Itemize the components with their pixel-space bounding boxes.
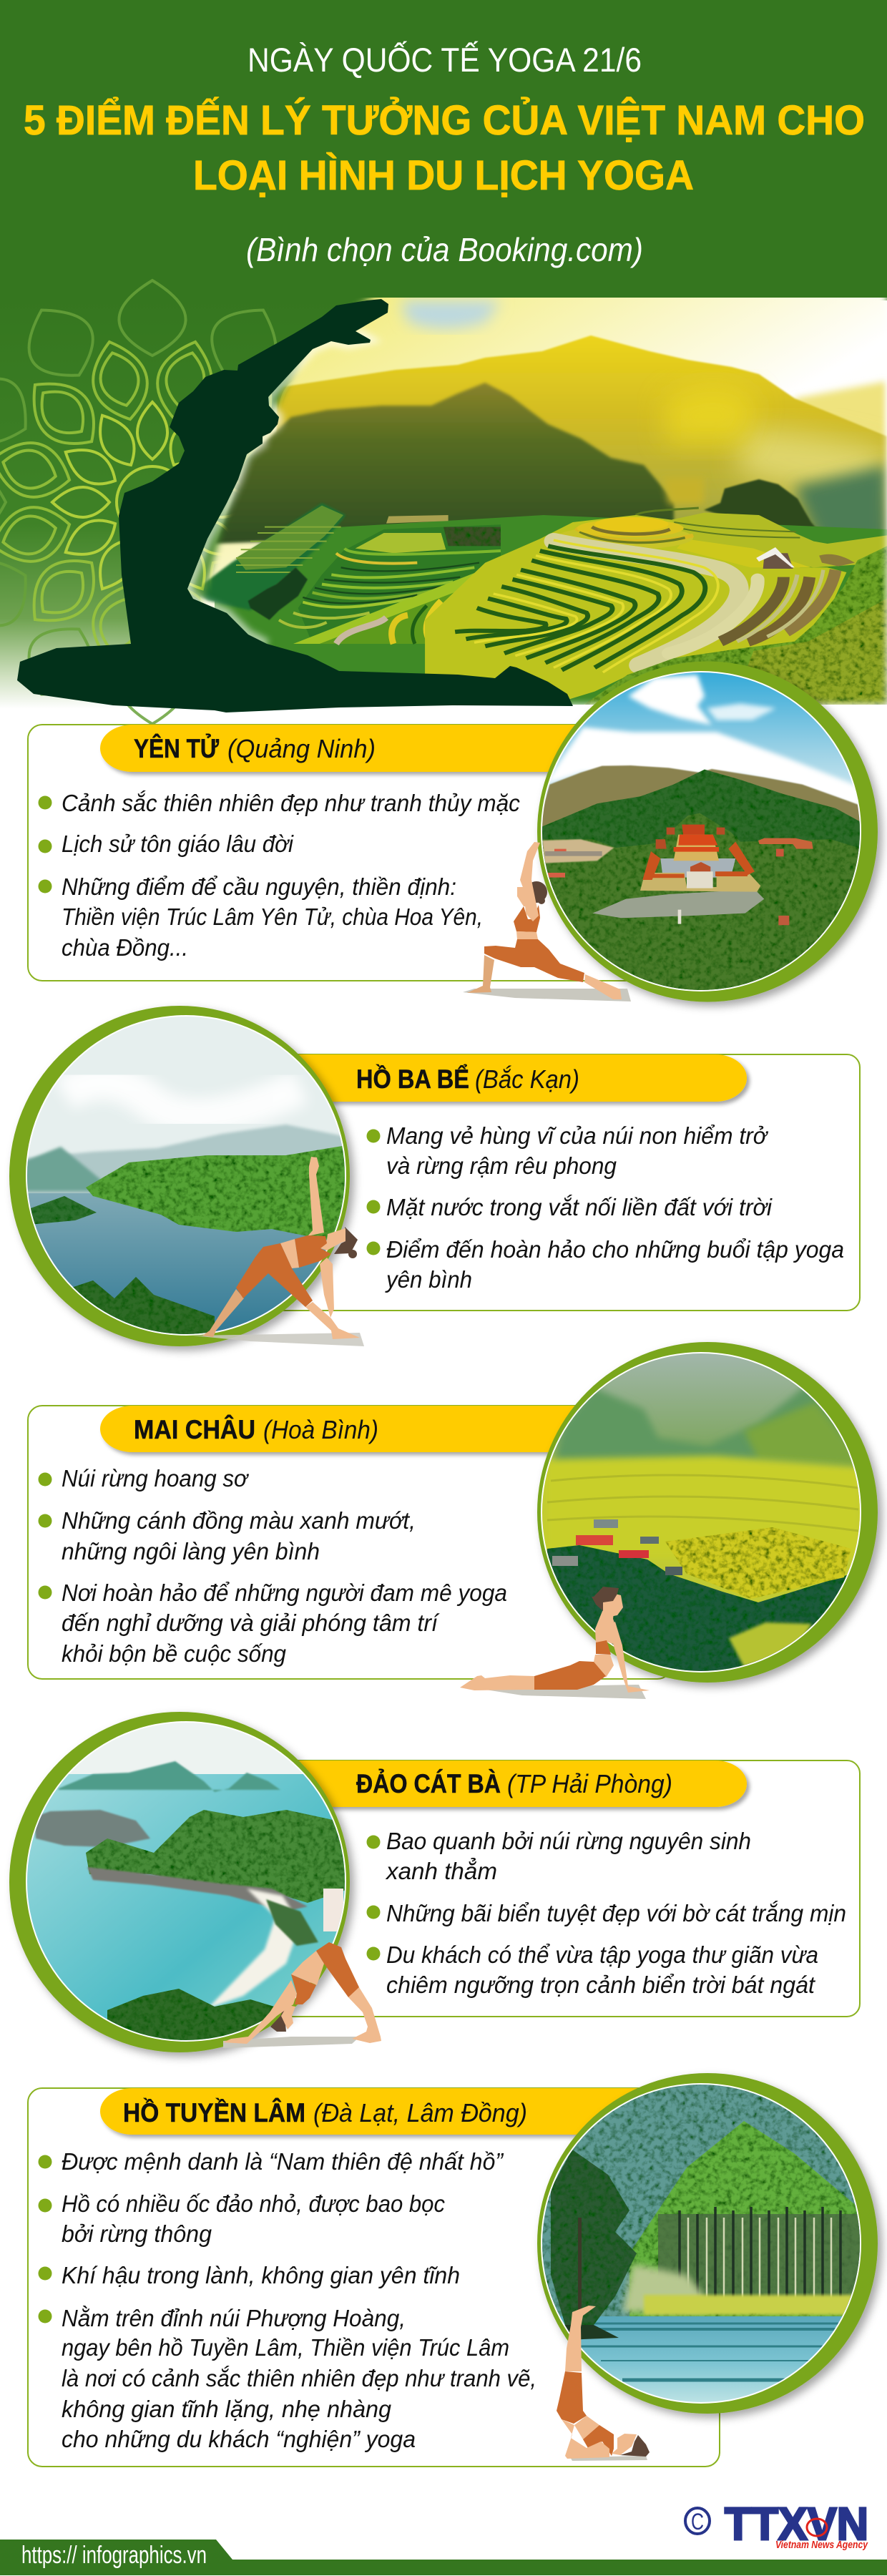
rice terrace landscape photo: [193, 298, 887, 708]
bullet list: Lịch sử tôn giáo lâu đời: [62, 831, 295, 857]
dome fields: [557, 517, 693, 549]
copyright mark: [685, 2508, 710, 2535]
bullet list: Cảnh sắc thiên nhiên đẹp như tranh thủy mặc: [62, 790, 520, 816]
mandala: [0, 279, 290, 724]
heading: [356, 1769, 672, 1798]
bullet list: Du khách có thể vừa tập yoga thư giãn vừa: [386, 1941, 818, 1968]
yoga figure: high lunge: [463, 842, 631, 1001]
bullet list: Những điểm để cầu nguyện, thiền định:: [62, 873, 456, 900]
bullet list: và rừng rậm rêu phong: [386, 1152, 617, 1179]
bullet list: Những cánh đồng màu xanh mướt,: [62, 1507, 416, 1534]
yoga figure: downward dog: [223, 1942, 381, 2048]
card outline: [215, 1760, 860, 2017]
photo: Ba Bể lake: [21, 1012, 351, 1345]
yoga silhouette: [17, 299, 573, 712]
heading: YÊN TỬ: [134, 733, 219, 763]
bullet list: yên bình: [385, 1266, 472, 1293]
card outline: [215, 1054, 860, 1311]
bullet list: là nơi có cảnh sắc thiên nhiên đẹp như tranh vẽ,: [62, 2365, 536, 2391]
bullet list: Hồ có nhiều ốc đảo nhỏ, được bao bọc: [62, 2190, 445, 2217]
photo ring: [9, 1006, 350, 1346]
bullet list: Khí hậu trong lành, không gian yên tĩnh: [62, 2262, 460, 2288]
copyright mark: C: [691, 2509, 704, 2535]
bullet list: [39, 2148, 536, 2452]
headline line 2: LOẠI HÌNH DU LỊCH YOGA: [193, 152, 694, 199]
photo: Tuyền Lâm lake and pine forest: [536, 2078, 866, 2409]
bullet list: Mang vẻ hùng vĩ của núi non hiểm trở: [386, 1122, 769, 1149]
title block: [24, 41, 865, 268]
bullet list: [366, 1828, 846, 1998]
heading: HỒ BA BỂ: [356, 1064, 469, 1094]
photo ring: [9, 1712, 350, 2052]
bullet list: [39, 790, 520, 961]
bullet list: Những bãi biển tuyệt đẹp với bờ cát trắng mịn: [386, 1900, 846, 1926]
bullet list: đến nghỉ dưỡng và giải phóng tâm trí: [62, 1610, 440, 1636]
name banner: [100, 1406, 615, 1452]
dark contour stripes: [455, 546, 705, 670]
heading: [134, 1414, 378, 1444]
headline line 1: 5 ĐIỂM ĐẾN LÝ TƯỞNG CỦA VIỆT NAM CHO: [24, 97, 865, 144]
heading: ĐẢO CÁT BÀ: [356, 1769, 501, 1798]
panel: Hồ Tuyền Lâm: [28, 2073, 878, 2467]
left terraces (hazy): [193, 503, 501, 644]
heading: (Bắc Kạn): [475, 1064, 579, 1094]
bullet list: [39, 1465, 507, 1667]
terrace base ground: [215, 515, 887, 708]
heading: [123, 2097, 527, 2127]
name banner: [100, 2088, 644, 2135]
heading: (Đà Lạt, Lâm Đồng): [313, 2098, 527, 2127]
card outline: [28, 725, 672, 981]
source url: https:// infographics.vn: [21, 2542, 207, 2569]
yoga figure: triangle pose: [193, 1157, 364, 1346]
bullet list: Được mệnh danh là “Nam thiên đệ nhất hồ”: [62, 2148, 504, 2175]
grassy slope: [578, 546, 887, 708]
temple complex: [545, 825, 813, 925]
bullet list: Bao quanh bởi núi rừng nguyên sinh: [386, 1828, 751, 1854]
right terraces: [425, 508, 887, 708]
card outline: [28, 1406, 672, 1679]
card outline: [28, 2088, 720, 2467]
hero left green background: [0, 298, 458, 709]
yoga figure: cobra pose: [460, 1587, 650, 1699]
photo: Cát Bà bay: [21, 1717, 351, 2046]
bullet list: cho những du khách “nghiện” yoga: [62, 2426, 416, 2452]
panel: Yên Tử: [28, 661, 887, 1001]
footer band: [0, 2540, 887, 2575]
heading: (TP Hải Phòng): [507, 1769, 672, 1798]
bullet list: khỏi bộn bề cuộc sống: [62, 1640, 287, 1667]
bullet list: xanh thẳm: [385, 1858, 497, 1884]
heading: (Quảng Ninh): [227, 734, 376, 763]
heading: (Hoà Bình): [263, 1415, 378, 1444]
bullet list: Thiền viện Trúc Lâm Yên Tử, chùa Hoa Yên,: [62, 903, 483, 930]
agency name: Vietnam News Agency: [775, 2539, 868, 2551]
header band: [0, 0, 887, 300]
photo: Yên Tử pagoda on the mountain: [542, 672, 860, 990]
bullet list: Nơi hoàn hảo để những người đam mê yoga: [62, 1580, 507, 1606]
subtitle: (Bình chọn của Booking.com): [246, 231, 643, 268]
photo ring: [537, 2073, 878, 2414]
panel: Đảo Cát Bà: [9, 1712, 860, 2052]
name banner: [272, 1760, 747, 1807]
bullet list: không gian tĩnh lặng, nhẹ nhàng: [62, 2396, 392, 2422]
silhouette glow: [187, 331, 371, 644]
panel: Hồ Ba Bể: [9, 1006, 860, 1346]
bullet list: những ngôi làng yên bình: [62, 1538, 320, 1564]
kicker: international yoga day: NGÀY QUỐC TẾ YOGA 21/6: [248, 41, 642, 79]
heading: [356, 1064, 579, 1094]
globe accent: [807, 2519, 827, 2536]
name banner: [272, 1054, 747, 1102]
bullet list: chiêm ngưỡng trọn cảnh biển trời bát ngát: [386, 1972, 816, 1998]
bullet list: bởi rừng thông: [62, 2220, 212, 2247]
bullet list: Nằm trên đỉnh núi Phượng Hoàng,: [62, 2305, 406, 2331]
panel: Mai Châu: [28, 1342, 878, 1699]
bullet list: Núi rừng hoang sơ: [62, 1465, 250, 1492]
bullet list: [366, 1122, 844, 1293]
hero illustration: [0, 280, 887, 724]
TTXVN logo: [685, 2498, 868, 2551]
hut: [756, 547, 795, 569]
photo ring: [537, 1342, 878, 1683]
photo ring: [537, 661, 878, 1001]
agency wordmark: TTXVN: [725, 2498, 868, 2550]
bullet list: Mặt nước trong vắt nối liền đất với trời: [386, 1194, 773, 1220]
bullet list: chùa Đồng...: [62, 934, 188, 961]
yoga figure: shoulder stand: [557, 2306, 650, 2461]
S-curve beige banks: [554, 542, 758, 665]
photo: Mai Châu valley: [536, 1348, 866, 1681]
dirt terraces: [720, 570, 835, 642]
heading: HỒ TUYỀN LÂM: [123, 2097, 305, 2127]
heading: MAI CHÂU: [134, 1414, 255, 1444]
bullet list: ngay bên hồ Tuyền Lâm, Thiền viện Trúc Lâm: [62, 2334, 509, 2361]
heading: [134, 733, 376, 763]
name banner: [100, 725, 615, 772]
bullet list: Điểm đến hoàn hảo cho những buổi tập yoga: [386, 1236, 844, 1263]
